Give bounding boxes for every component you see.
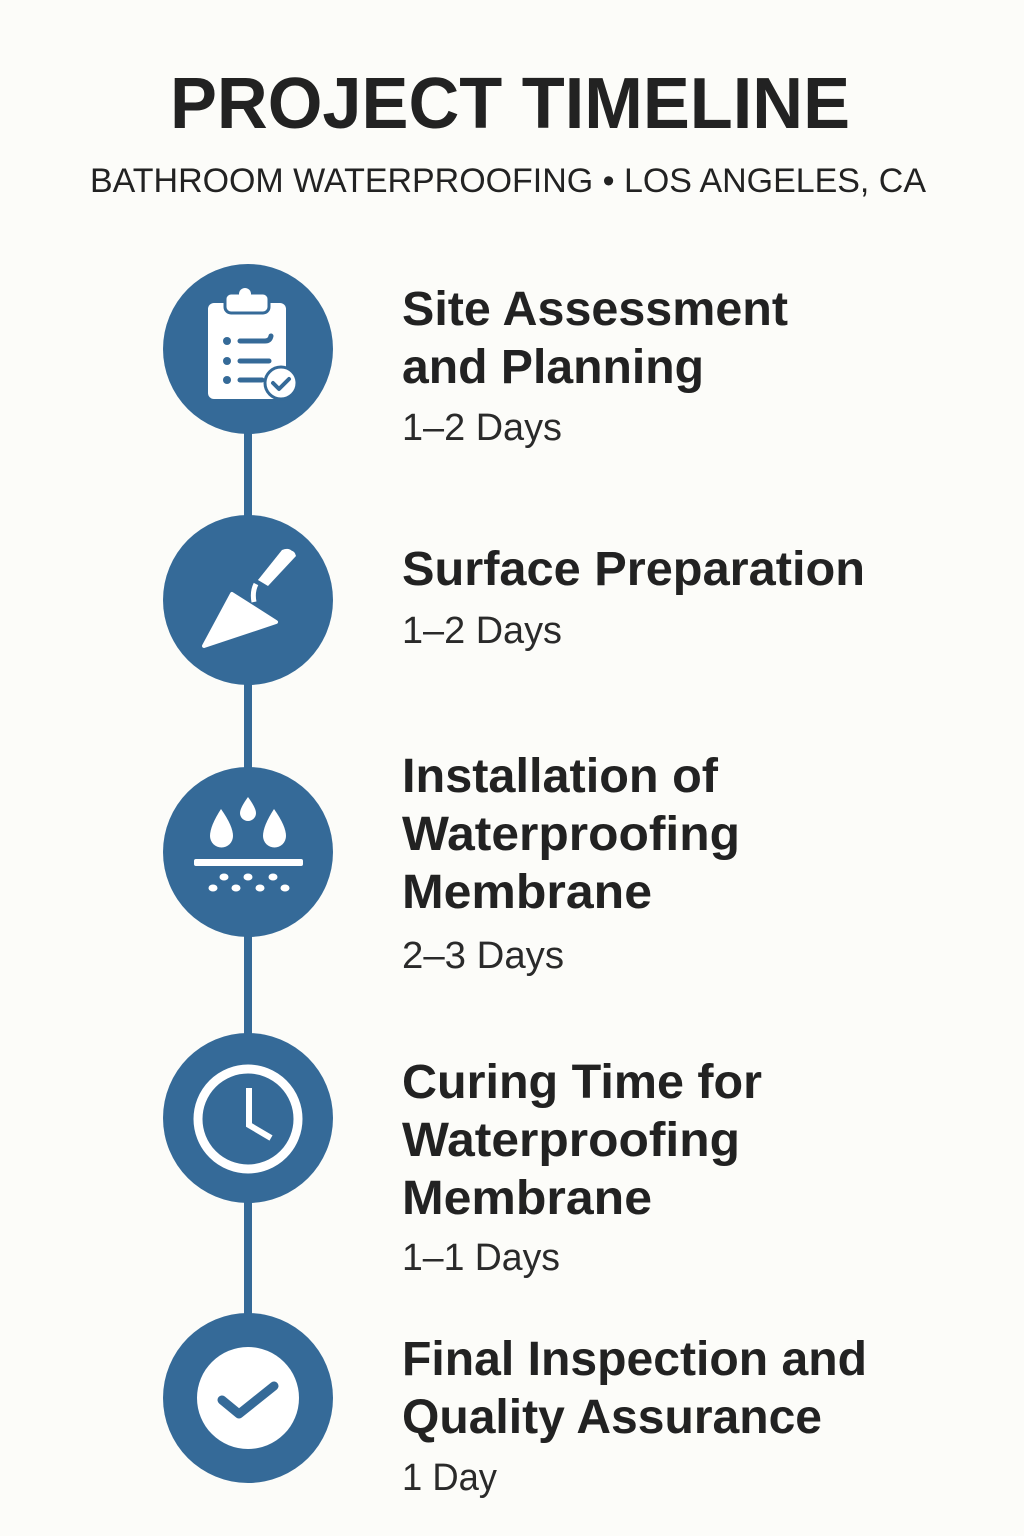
step 1 text	[402, 283, 788, 449]
step 4 text	[402, 1056, 762, 1279]
step 1 text: 1–2 Days	[402, 407, 562, 449]
title: PROJECT TIMELINE	[170, 64, 850, 144]
step 3 text: Waterproofing	[402, 808, 740, 861]
step 5 text: Final Inspection and	[402, 1333, 867, 1386]
step 5 text	[402, 1333, 867, 1499]
step 4 text: 1–1 Days	[402, 1237, 560, 1279]
step 1 text: Site Assessment	[402, 283, 788, 336]
step 2 text	[402, 543, 865, 652]
step 3 text: 2–3 Days	[402, 935, 564, 977]
step 3 icon: water drops membrane	[163, 767, 333, 937]
step 5 text: 1 Day	[402, 1457, 497, 1499]
timeline connector	[244, 349, 252, 1398]
step 2 text: Surface Preparation	[402, 543, 865, 596]
step 3 text: Membrane	[402, 866, 652, 919]
step 2 text: 1–2 Days	[402, 610, 562, 652]
step 3 text: Installation of	[402, 750, 719, 803]
step 4 text: Curing Time for	[402, 1056, 762, 1109]
step 1 text: and Planning	[402, 341, 704, 394]
subtitle: BATHROOM WATERPROOFING • LOS ANGELES, CA	[90, 162, 926, 200]
step 5 text: Quality Assurance	[402, 1391, 822, 1444]
step 2 icon: trowel	[163, 515, 333, 685]
step 4 text: Waterproofing	[402, 1114, 740, 1167]
step 4 icon: clock	[163, 1033, 333, 1203]
step 3 text	[402, 750, 740, 977]
step 5 icon: check	[163, 1313, 333, 1483]
step 4 text: Membrane	[402, 1172, 652, 1225]
step 1 icon: clipboard	[163, 264, 333, 434]
